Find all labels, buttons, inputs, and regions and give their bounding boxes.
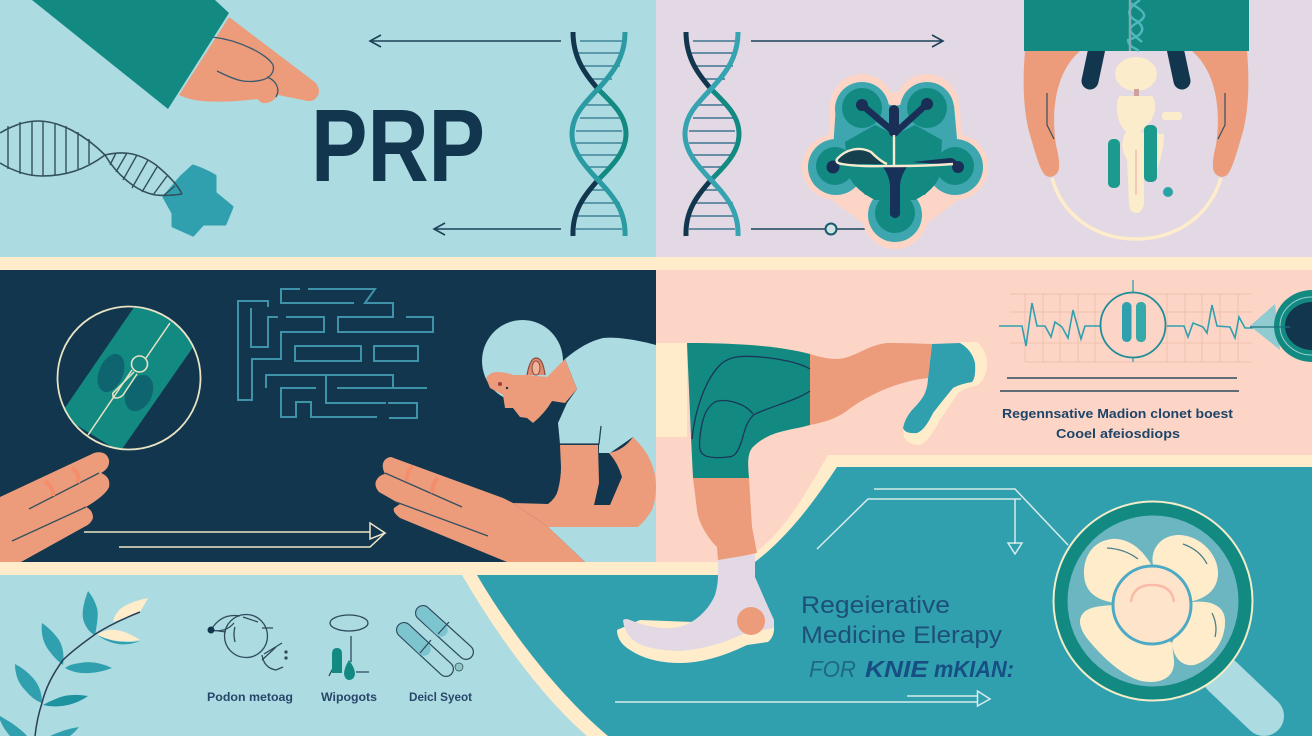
icon: vertical DNA helix 2	[685, 32, 739, 236]
text: regenerative medicine heading	[801, 592, 1014, 682]
text: regenerative medicine heading: Regeierative	[801, 592, 950, 619]
text: regenerative medicine heading: mKIAN:	[934, 656, 1014, 682]
icon: lamp and drop	[329, 615, 369, 680]
icon: vertical DNA helix	[572, 32, 626, 236]
arrow: top right arrow	[751, 35, 943, 47]
diagram: maze of lines	[238, 289, 433, 418]
icon: gloved hand pointing	[32, 0, 319, 109]
divider band: top cream	[0, 257, 1312, 270]
arrow: top left arrow	[370, 35, 561, 47]
icon: teal blob molecule	[164, 166, 232, 235]
panel: lavender molecule panel	[656, 0, 1312, 258]
text: icon captions: Wipogots	[321, 690, 377, 704]
icon: two capsules	[404, 613, 466, 671]
icon: magnified tissue	[58, 300, 205, 452]
arrow: double arrow across panel	[84, 523, 385, 547]
divider band: lower cream	[0, 562, 720, 575]
panel: bottom left light panel	[0, 575, 700, 736]
panel: PRP title panel	[0, 0, 656, 258]
icon: left hand	[0, 452, 109, 562]
text: icon captions: Deicl Syeot	[409, 690, 472, 704]
icon: eye lens	[1250, 290, 1312, 362]
panel: pink heart monitor panel	[656, 270, 1312, 562]
arrow: bottom double arrow	[615, 691, 990, 706]
arrow: branching connector lines	[817, 489, 1068, 554]
arrow: bottom left arrow	[434, 223, 561, 235]
icon: flower molecule	[802, 74, 988, 249]
icon: horizontal DNA helix	[0, 121, 182, 196]
figure: person leaning forward	[482, 320, 656, 562]
text: icon captions: Podon metoag	[207, 690, 293, 704]
text: monitor caption: Cooel afeiosdiops	[1056, 426, 1180, 441]
text: regenerative medicine heading: KNIE	[865, 656, 929, 682]
text: icon captions	[207, 690, 472, 704]
panel: dark treatment panel	[0, 270, 656, 562]
text: monitor caption: Regennsative Madion clonet boest	[1002, 406, 1234, 421]
text: monitor caption	[1002, 406, 1234, 441]
title: PRP: PRP	[311, 88, 485, 203]
icon: right hand	[375, 457, 585, 562]
chart: ECG monitor	[999, 280, 1273, 362]
icon: arms around knee joint	[1024, 0, 1249, 239]
divider lines above caption	[1000, 378, 1239, 391]
panel: teal magnifier panel	[462, 455, 1312, 736]
icon: magnifier with cell	[1054, 502, 1264, 716]
figure: runner leg	[617, 342, 987, 663]
text: regenerative medicine heading: Medicine Elerapy	[801, 622, 1002, 649]
icon: stethoscope circle	[208, 614, 287, 670]
arrow: connector with node	[751, 224, 875, 234]
text: regenerative medicine heading: FOR	[809, 656, 856, 682]
icon: plant branch	[0, 591, 148, 736]
